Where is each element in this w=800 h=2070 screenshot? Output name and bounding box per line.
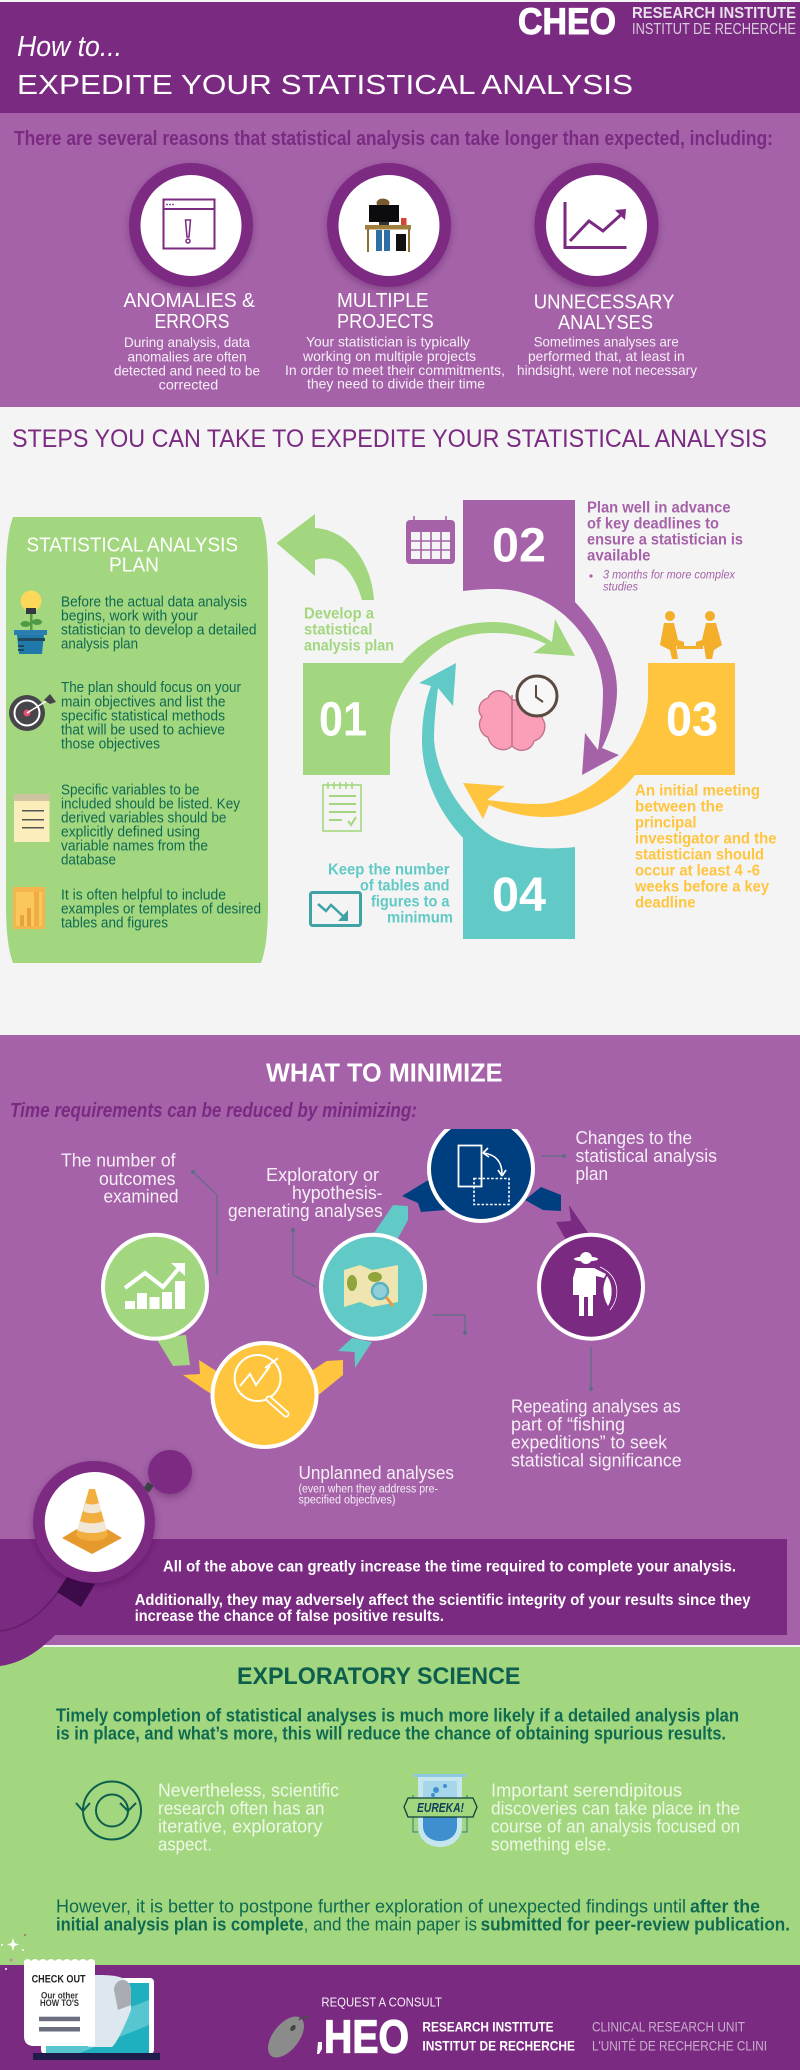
label: multiple projects heading and text: working on multiple projects	[302, 348, 476, 364]
title	[17, 31, 633, 100]
label: anomalies heading and text: corrected	[159, 376, 218, 392]
text: initial meeting: between the	[635, 798, 724, 815]
text: initial meeting: weeks before a key	[634, 878, 769, 895]
text: serendipitous discoveries: Important serendipitous	[491, 1781, 682, 1801]
label: unnecessary analyses heading and text: ANALYSES	[558, 312, 653, 334]
text: initial meeting: principal	[635, 814, 696, 831]
icon: person at desk	[327, 163, 451, 287]
label: exploratory analyses	[228, 1165, 383, 1221]
bullet note: studies	[603, 580, 638, 594]
panel heading	[26, 535, 238, 577]
text: clinical research unit: CLINICAL RESEARCH UNIT	[592, 2019, 745, 2035]
logo: CHEO research institute	[518, 1, 796, 42]
footer band	[0, 1965, 800, 2070]
text: initial meeting: investigator and the	[635, 830, 777, 847]
text: objectives: main objectives and list the	[61, 694, 226, 711]
text: keep tables to a minimum: Keep the number	[328, 862, 450, 879]
text: keep tables to a minimum: of tables and	[360, 878, 450, 895]
logo: CHEO research institute: CHEO	[518, 1, 616, 42]
label: anomalies heading and text: detected and need to be	[114, 362, 260, 378]
icon: meeting	[660, 611, 722, 659]
icon: iteration cycle	[76, 1782, 141, 1840]
icon: trend chart	[534, 163, 658, 287]
text: request a consult: REQUEST A CONSULT	[321, 1995, 442, 2010]
text: work with statistician: Before the actual data analysis	[61, 594, 247, 611]
callout band: All of the above can greatly increase the time required to complete your analysis.	[163, 1559, 736, 1576]
text: postpone exploration: initial analysis plan is complete	[56, 1915, 304, 1935]
label: repeating analyses: expeditions” to seek	[511, 1433, 668, 1453]
step 03 arrow: 03	[666, 694, 718, 747]
icon: computer mouse	[261, 2010, 311, 2064]
step 04 arrow: 04	[492, 869, 546, 922]
text: work with statistician	[61, 594, 257, 653]
label: anomalies heading and text: During analysis, data	[124, 334, 250, 350]
text: plan in advance: ensure a statistician is	[587, 532, 743, 549]
text: serendipitous discoveries: discoveries can take place in the	[491, 1799, 740, 1819]
text: variables: database	[61, 852, 116, 869]
text: variables: derived variables should be	[61, 810, 226, 827]
logo: CHEO footer: HEO	[324, 2011, 409, 2063]
text: clinical research unit	[592, 2019, 767, 2054]
circle: changes to the plan	[427, 1129, 535, 1223]
circle: exploratory analyses	[319, 1233, 427, 1341]
leader lines	[191, 1154, 593, 1391]
text: objectives: that will be used to achieve	[61, 722, 225, 739]
heading: steps: STEPS YOU CAN TAKE TO EXPEDITE YOUR STATISTICAL ANALYSIS	[12, 425, 767, 453]
callout band	[0, 1539, 787, 1635]
green section top line	[0, 1645, 800, 1647]
label: number of outcomes: The number of	[61, 1151, 176, 1171]
icon: checklist notepad	[323, 782, 361, 831]
text: templates: examples or templates of desired	[61, 900, 261, 917]
label: number of outcomes	[61, 1151, 178, 1207]
text: objectives: those objectives	[61, 736, 160, 753]
text: serendipitous discoveries: something else.	[491, 1835, 611, 1855]
arrow: step 1 to analysis plan	[276, 514, 374, 600]
label: unplanned analyses: specified objectives)	[298, 1494, 396, 1506]
label: changes to plan: Changes to the	[576, 1128, 692, 1148]
icon: eureka test tube: EUREKA!	[417, 1801, 464, 1815]
subheading: time requirements: Time requirements can be reduced by minimizing:	[10, 1100, 417, 1122]
text: plan in advance: Plan well in advance	[587, 500, 731, 517]
text: postpone exploration: after the	[690, 1897, 760, 1917]
label: unnecessary analyses heading and text: hindsight, were not necessary	[517, 362, 697, 378]
label: repeating analyses	[511, 1397, 682, 1471]
icon: notepad list	[14, 794, 50, 842]
label: changes to plan: statistical analysis	[576, 1146, 717, 1166]
icon: window with warning	[129, 163, 253, 287]
text: variables: Specific variables to be	[61, 782, 200, 799]
text: variables: variable names from the	[61, 838, 208, 855]
label: multiple projects heading and text	[285, 290, 505, 392]
bullet note	[589, 568, 736, 594]
text: timely completion	[56, 1706, 739, 1744]
label: unplanned analyses: (even when they address pre-	[298, 1483, 438, 1495]
text: initial meeting: An initial meeting	[635, 782, 760, 799]
label: repeating analyses: Repeating analyses as	[511, 1397, 681, 1417]
panel: anomalies and errors	[114, 163, 260, 392]
icon: laptop with check out note: CHECK OUT	[32, 1973, 86, 1985]
text: serendipitous discoveries	[491, 1781, 740, 1855]
label: unplanned analyses	[298, 1463, 454, 1506]
text: iterative research: iterative, exploratory	[158, 1817, 322, 1837]
text: develop a plan: analysis plan	[304, 638, 394, 655]
label: changes to plan	[576, 1128, 717, 1184]
text: initial meeting	[634, 782, 777, 911]
label: unnecessary analyses heading and text: UNNECESSARY	[534, 292, 674, 314]
text: keep tables to a minimum: minimum	[387, 910, 453, 927]
text: postpone exploration: , and the main paper is	[304, 1915, 477, 1935]
label: multiple projects heading and text: Your statistician is typically	[306, 334, 470, 350]
label: anomalies heading and text: ANOMALIES &	[124, 290, 256, 312]
label: unplanned analyses: Unplanned analyses	[298, 1463, 454, 1483]
bullet note: 3 months for more complex	[603, 568, 736, 582]
text: develop a plan: statistical	[304, 622, 372, 639]
icon: laptop with check out note: HOW TO'S	[40, 1998, 79, 2009]
title: EXPEDITE YOUR STATISTICAL ANALYSIS	[17, 69, 633, 100]
step 02 arrow: 02	[492, 520, 546, 573]
logo: CHEO footer: RESEARCH INSTITUTE	[422, 2019, 554, 2035]
label: multiple projects heading and text: In order to meet their commitments,	[285, 362, 505, 378]
text: postpone exploration: submitted for peer-review publication.	[481, 1915, 790, 1935]
heading: exploratory science: EXPLORATORY SCIENCE	[237, 1663, 520, 1690]
label: anomalies heading and text: anomalies are often	[128, 348, 246, 364]
step 04 arrow	[419, 663, 575, 939]
icon: magnifier badge with traffic cone	[0, 1450, 192, 1666]
step 02 arrow	[463, 500, 619, 775]
icon: decreasing chart	[310, 892, 360, 926]
icon: target	[9, 694, 56, 731]
label: multiple projects heading and text: they need to divide their time	[307, 376, 485, 392]
text: initial meeting: deadline	[635, 894, 696, 911]
text: variables: included should be listed. Key	[61, 796, 240, 813]
label: exploratory analyses: hypothesis-	[292, 1183, 383, 1203]
label: multiple projects heading and text: MULTIPLE	[337, 290, 428, 312]
circle: fishing expeditions	[537, 1233, 645, 1341]
text: objectives: The plan should focus on your	[61, 679, 241, 696]
label: anomalies heading and text	[114, 290, 260, 392]
label: multiple projects heading and text: PROJECTS	[337, 311, 434, 333]
text: postpone exploration: However, it is better to postpone further exploration of unexpected findings until	[56, 1897, 686, 1917]
text: work with statistician: begins, work with your	[61, 608, 198, 625]
text: templates: It is often helpful to include	[61, 886, 226, 903]
label: unnecessary analyses heading and text: performed that, at least in	[528, 348, 685, 364]
text: initial meeting: statistician should	[635, 846, 764, 863]
label: unnecessary analyses heading and text	[517, 292, 697, 378]
text: iterative research	[158, 1781, 339, 1855]
label: number of outcomes: outcomes	[99, 1169, 176, 1189]
text: initial meeting: occur at least 4 -6	[635, 862, 760, 879]
text: postpone exploration	[56, 1897, 790, 1935]
text: templates: tables and figures	[61, 914, 168, 931]
text: variables	[61, 782, 240, 869]
text: develop a plan: Develop a	[304, 606, 374, 623]
text: timely completion: Timely completion of statistical analyses is much more likely if a detailed analysis plan	[56, 1706, 739, 1726]
label: repeating analyses: statistical significance	[511, 1451, 682, 1471]
label: anomalies heading and text: ERRORS	[154, 311, 230, 333]
title: How to...	[17, 31, 122, 63]
icon: orange chart	[13, 887, 45, 929]
logo: CHEO footer: INSTITUT DE RECHERCHE	[422, 2038, 575, 2054]
text: objectives	[61, 679, 241, 753]
circle: number of outcomes	[101, 1233, 209, 1341]
text: clinical research unit: L'UNITÉ DE RECHERCHE CLINI	[592, 2038, 767, 2054]
icon: sparkles	[1, 1934, 26, 1970]
text: templates	[61, 886, 261, 931]
step 01 arrow: 01	[319, 694, 367, 747]
label: changes to plan: plan	[576, 1164, 608, 1184]
text: serendipitous discoveries: course of an analysis focused on	[491, 1817, 740, 1837]
panel: multiple projects	[285, 163, 505, 392]
step 01 arrow	[303, 619, 575, 775]
text: iterative research: Nevertheless, scientific	[158, 1781, 339, 1801]
text: objectives: specific statistical methods	[61, 708, 225, 725]
icon: calendar	[406, 516, 455, 564]
text: timely completion: is in place, and what’s more, this will reduce the chance of obtaining spurious results.	[56, 1724, 726, 1744]
callout band: Additionally, they may adversely affect the scientific integrity of your results since they	[135, 1592, 751, 1609]
text: keep tables to a minimum: figures to a	[371, 894, 450, 911]
text: develop a plan	[304, 606, 394, 655]
callout band: increase the chance of false positive results.	[135, 1608, 444, 1625]
panel heading: STATISTICAL ANALYSIS	[26, 535, 238, 557]
icon: lightbulb plant	[14, 590, 47, 654]
icon: brain and clock	[479, 676, 557, 750]
text: plan in advance: available	[587, 548, 651, 565]
label: exploratory analyses: Exploratory or	[266, 1165, 379, 1185]
panel heading: PLAN	[109, 555, 159, 577]
step 03 arrow	[463, 663, 735, 819]
text: work with statistician: analysis plan	[61, 636, 138, 653]
label: number of outcomes: examined	[104, 1187, 178, 1207]
text: plan in advance	[587, 500, 743, 565]
text: plan in advance: of key deadlines to	[587, 516, 719, 533]
icon: eureka test tube	[404, 1774, 477, 1847]
label: unnecessary analyses heading and text: Sometimes analyses are	[534, 334, 679, 350]
text: iterative research: research often has an	[158, 1799, 324, 1819]
text: work with statistician: statistician to develop a detailed	[61, 622, 257, 639]
text: variables: explicitly defined using	[61, 824, 200, 841]
header band	[0, 1, 800, 113]
circle: unplanned analyses	[210, 1341, 318, 1449]
text: iterative research: aspect.	[158, 1835, 212, 1855]
panel: unnecessary analyses	[517, 163, 697, 378]
panel: statistical analysis plan	[6, 517, 268, 963]
icon: laptop with check out note	[24, 1959, 160, 2060]
logo: CHEO footer	[317, 2011, 575, 2063]
icon: laptop with check out note: Our other	[41, 1991, 78, 2002]
label: exploratory analyses: generating analyses	[228, 1201, 383, 1221]
text: keep tables to a minimum	[328, 862, 453, 927]
connector ribbons	[156, 1179, 589, 1398]
heading: what to minimize: WHAT TO MINIMIZE	[266, 1058, 502, 1088]
label: repeating analyses: part of “fishing	[511, 1415, 625, 1435]
